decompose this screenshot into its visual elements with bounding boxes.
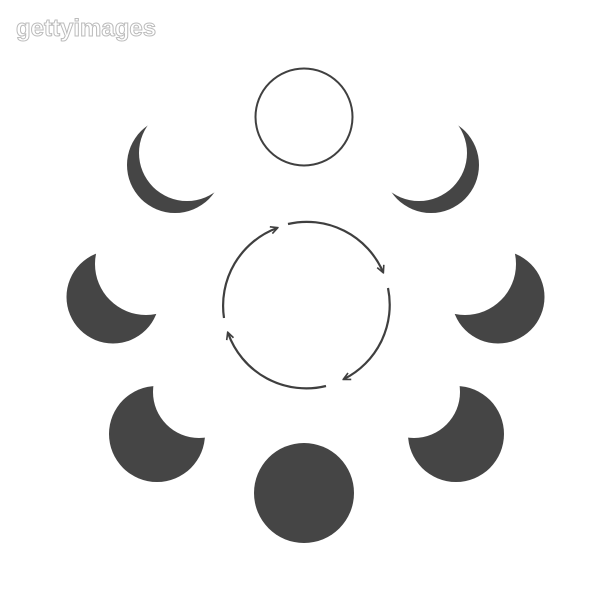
icon: full moon outline bbox=[256, 68, 352, 166]
icon: crescent mid-right bbox=[414, 213, 544, 344]
watermark: gettyimages bbox=[16, 15, 156, 42]
icon: gibbous bottom-right bbox=[368, 346, 504, 482]
icon: new moon bbox=[254, 443, 354, 543]
icon: crescent top-left bbox=[127, 105, 235, 213]
icon: gibbous bottom-left bbox=[109, 346, 245, 482]
icon: crescent top-right bbox=[371, 105, 479, 213]
icon: crescent mid-left bbox=[66, 213, 197, 344]
cycle arrows bbox=[223, 222, 390, 388]
